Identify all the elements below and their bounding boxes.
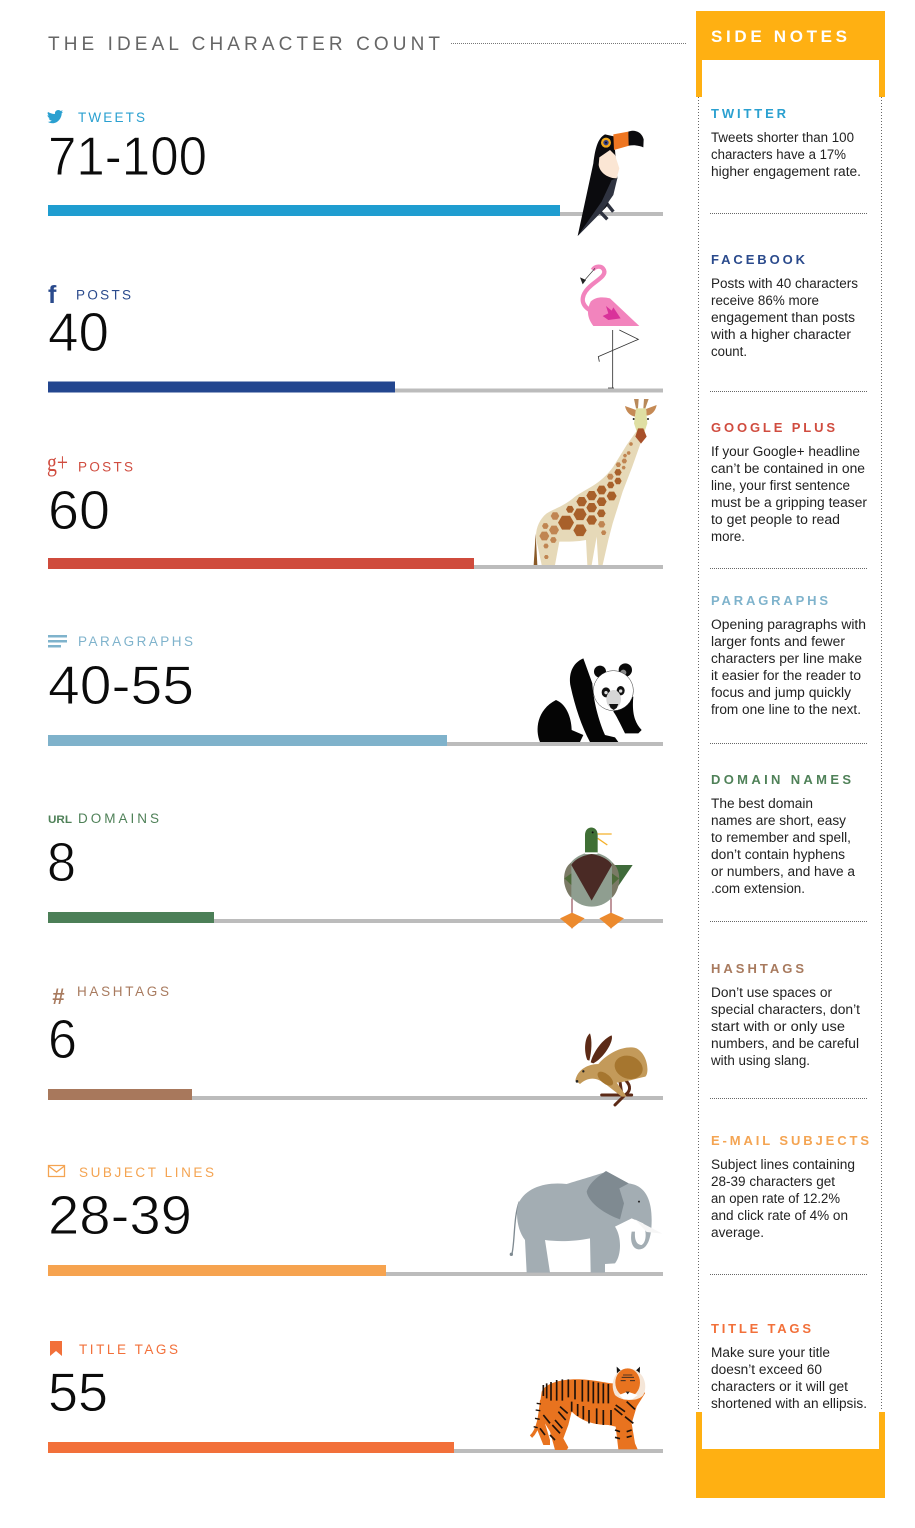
- bar: domains: [48, 912, 663, 923]
- note: hashtags: [710, 961, 860, 1068]
- text: domain names note: or numbers, and have a: [711, 864, 855, 879]
- number: 40-55: 40-55: [48, 654, 194, 716]
- note: twitter: [711, 106, 861, 179]
- label: subject lines: SUBJECT LINES: [79, 1165, 214, 1180]
- note: title tags: [711, 1321, 867, 1411]
- heading: domain names: DOMAIN NAMES: [711, 772, 851, 787]
- note: paragraphs: [711, 593, 866, 717]
- text: e-mail subjects note: 28-39 characters get: [711, 1174, 835, 1189]
- note: google plus: [711, 420, 868, 544]
- text: title tags note: doesn’t exceed 60: [711, 1362, 822, 1377]
- label: title tags: TITLE TAGS: [79, 1342, 178, 1357]
- text: twitter note: higher engagement rate.: [711, 164, 861, 179]
- text: e-mail subjects note: an open rate of 12.2%: [711, 1191, 840, 1206]
- label: tweets: TWEETS: [78, 110, 145, 125]
- label: paragraphs: PARAGRAPHS: [78, 634, 193, 649]
- bar: paragraphs: [48, 735, 663, 746]
- text: hashtags note: numbers, and be careful: [711, 1036, 859, 1051]
- icon: elephant tusk: [635, 1219, 662, 1234]
- icon: url: URL: [48, 814, 72, 826]
- icon: paragraph lines: [48, 635, 67, 648]
- icon: flamingo: [580, 267, 639, 388]
- note: domain names: [711, 772, 855, 896]
- side notes header: [696, 11, 885, 97]
- heading: twitter: TWITTER: [711, 106, 787, 121]
- text: domain names note: don’t contain hyphens: [711, 847, 845, 862]
- text: domain names note: .com extension.: [711, 881, 805, 896]
- text: e-mail subjects note: and click rate of 4% on: [711, 1208, 848, 1223]
- text: paragraphs note: from one line to the next.: [711, 702, 861, 717]
- text: title tags note: characters or it will get: [711, 1379, 848, 1394]
- text: paragraphs note: Opening paragraphs with: [711, 617, 866, 632]
- text: facebook note: Posts with 40 characters: [711, 276, 858, 291]
- label: domains: DOMAINS: [78, 811, 159, 826]
- text: hashtags note: start with or only use: [711, 1019, 845, 1034]
- panel: side notes: [696, 11, 885, 1498]
- text: twitter note: [711, 130, 861, 179]
- text: google plus note: can’t be contained in one: [711, 461, 865, 476]
- heading: title tags: TITLE TAGS: [711, 1321, 811, 1336]
- text: title tags note: shortened with an ellipsis.: [711, 1396, 867, 1411]
- row: paragraphs: [48, 634, 663, 746]
- text: facebook note: [710, 276, 858, 359]
- text: title tags note: [711, 1345, 867, 1411]
- text: paragraphs note: it easier for the reader to: [711, 668, 861, 683]
- text: google plus note: [711, 444, 868, 544]
- icon: google plus: g+: [47, 448, 68, 477]
- text: google plus note: to get people to read: [711, 512, 840, 527]
- bar: facebook: [48, 382, 663, 392]
- text: paragraphs note: focus and jump quickly: [711, 685, 851, 700]
- number: 60: 60: [48, 479, 110, 541]
- text: twitter note: characters have a 17%: [711, 147, 846, 162]
- icon: facebook f: f: [48, 281, 57, 309]
- text: paragraphs note: characters per line make: [711, 651, 862, 666]
- text: hashtags note: Don’t use spaces or: [711, 985, 833, 1000]
- bar: title tags: [48, 1442, 663, 1453]
- row: subject lines: [48, 1165, 663, 1276]
- text: google plus note: If your Google+ headline: [711, 444, 860, 459]
- row: google plus posts: [47, 399, 663, 569]
- number: 6: 6: [48, 1008, 77, 1070]
- text: google plus note: line, your first sentence: [711, 478, 850, 493]
- note: facebook: [710, 252, 858, 359]
- text: e-mail subjects note: Subject lines containing: [711, 1157, 855, 1172]
- icon: tiger: [531, 1367, 645, 1450]
- text: paragraphs note: [711, 617, 866, 717]
- text: facebook note: receive 86% more: [711, 293, 819, 308]
- row: domains: [47, 811, 663, 928]
- note: e-mail subjects: [711, 1133, 869, 1240]
- number: 28-39: 28-39: [48, 1184, 192, 1246]
- row: title tags: [48, 1341, 663, 1453]
- text: e-mail subjects note: average.: [711, 1225, 764, 1240]
- text: hashtags note: special characters, don’t: [711, 1002, 860, 1017]
- bar: hashtags: [48, 1089, 663, 1100]
- side notes footer: [696, 1412, 885, 1498]
- text: facebook note: count.: [711, 344, 747, 359]
- row: hashtags: [48, 984, 663, 1105]
- icon: toucan: [578, 131, 644, 236]
- row: facebook posts: [48, 267, 663, 392]
- text: domain names note: to remember and spell,: [711, 830, 851, 845]
- icon: panda: [538, 658, 642, 742]
- label: posts: POSTS: [78, 460, 133, 474]
- icon: bookmark: [50, 1341, 62, 1356]
- side notes header: SIDE NOTES: [711, 27, 847, 46]
- heading: e-mail subjects: E-MAIL SUBJECTS: [711, 1133, 869, 1148]
- text: e-mail subjects note: [711, 1157, 855, 1240]
- heading: hashtags: HASHTAGS: [711, 961, 804, 976]
- number: 71-100: 71-100: [48, 125, 207, 187]
- icon: duck: [560, 827, 633, 928]
- number: 55: 55: [48, 1361, 108, 1423]
- icon: giraffe: [534, 399, 657, 565]
- text: google plus note: more.: [711, 529, 745, 544]
- icon: envelope: [48, 1166, 64, 1176]
- heading: paragraphs: PARAGRAPHS: [711, 593, 828, 608]
- icon: hash: #: [52, 984, 65, 1009]
- text: facebook note: with a higher character: [710, 327, 852, 342]
- text: hashtags note: [710, 985, 860, 1068]
- text: title tags note: Make sure your title: [711, 1345, 830, 1360]
- text: google plus note: must be a gripping teaser: [711, 495, 868, 510]
- text: domain names note: The best domain: [711, 796, 813, 811]
- bar: tweets: [48, 205, 663, 216]
- text: facebook note: engagement than posts: [711, 310, 855, 325]
- heading: facebook: FACEBOOK: [711, 252, 806, 267]
- bar: subject lines: [48, 1265, 663, 1276]
- bar: google plus: [48, 558, 663, 569]
- text: domain names note: [711, 796, 855, 896]
- number: 40: 40: [48, 301, 109, 363]
- number: 8: 8: [47, 831, 76, 893]
- text: twitter note: Tweets shorter than 100: [711, 130, 854, 145]
- text: domain names note: names are short, easy: [711, 813, 846, 828]
- row: tweets: [48, 110, 663, 236]
- icon: elephant: [510, 1171, 662, 1273]
- title: THE IDEAL CHARACTER COUNT: [48, 34, 440, 55]
- icon: hare: [575, 1033, 647, 1105]
- label: hashtags: HASHTAGS: [77, 984, 169, 999]
- text: hashtags note: with using slang.: [710, 1053, 810, 1068]
- icon: twitter bird: [48, 110, 63, 123]
- label: posts: POSTS: [76, 288, 131, 302]
- text: paragraphs note: larger fonts and fewer: [711, 634, 846, 649]
- heading: google plus: GOOGLE PLUS: [711, 420, 835, 435]
